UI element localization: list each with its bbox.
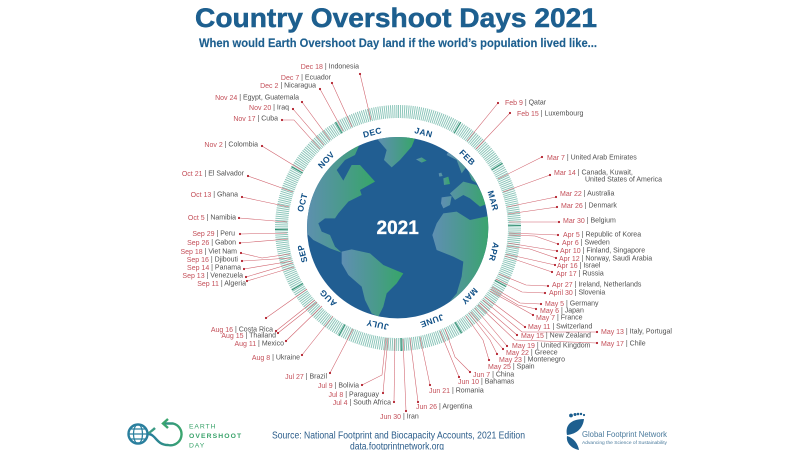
logo: Global Footprint Network: Advancing the Science of Sustainability [582,440,668,446]
leader and label: May 17 Chile: May 17 | Chile [601,340,646,348]
leader and label: Nov 17 Cuba [233,116,320,149]
leader and label: May 5 Germany: May 5 | Germany [545,300,599,308]
leader and label: Sep 26 Gabon [187,239,288,246]
leader and label: Jul 4 South Africa: Jul 4 | South Africa [333,400,391,406]
unlabelled leader [265,289,307,319]
leader and label: Aug 8 Ukraine [252,316,333,362]
leader and label: Sep 26 Gabon: Sep 26 | Gabon [187,240,236,246]
globe year: 2021 [377,218,419,239]
leader and label: Dec 2 Nicaragua: Dec 2 | Nicaragua [260,82,316,90]
leader and label: Sep 29 Peru [192,230,287,238]
leader and label: May 25 Spain: May 25 | Spain [488,364,535,370]
leader and label: Mar 22 Australia: Mar 22 | Australia [560,190,614,198]
leader and label: Nov 24 Egypt, Guatemala: Nov 24 | Egypt, Guatemala [215,94,299,102]
month labels: JUNE [419,312,445,330]
leader and label: May 7 France: May 7 | France [536,314,583,322]
leader and label: Oct 21 El Salvador [182,170,293,192]
leader and label: Apr 6 Sweden [509,235,610,246]
leader and label: Dec 18 Indonesia [301,64,371,120]
leader and label: May 6 Japan: May 6 | Japan [540,308,584,314]
leader and label: Sep 13 Venezuela [182,263,293,280]
leader and label: Sep 16 Djibouti [187,256,291,264]
leader and label: Sep 18 Viet Nam: Sep 18 | Viet Nam [180,248,237,256]
leader and label: Jul 4 South Africa [333,339,395,406]
leader and label: May 19 United Kingdom [475,308,591,350]
leader and label: Dec 7 Ecuador [281,74,352,127]
leader and label: May 13 Italy, Portugal: May 13 | Italy, Portugal [601,328,672,336]
month labels: AUG [317,287,339,309]
leader and label: Jun 26 Argentina: Jun 26 | Argentina [416,404,472,410]
leader and label: May 19 United Kingdom: May 19 | United Kingdom [512,342,591,350]
leader and label: May 15 New Zealand: May 15 | New Zealand [521,332,591,340]
leader and label: Apr 10 Finland, Singapore: Apr 10 | Finland, Singapore [560,248,645,254]
logo wordmark [189,424,242,450]
leader and label: Dec 2 Nicaragua [260,82,343,131]
leader and label: Apr 17 Russia [505,256,604,278]
globe [303,130,493,318]
leader and label: Jun 21 Romania: Jun 21 | Romania [429,388,484,394]
leader and label: Jun 10 Bahamas: Jun 10 | Bahamas [458,378,515,386]
month labels: MAR [486,189,501,212]
leader and label: Jul 27 Brazil: Jul 27 | Brazil [285,374,327,380]
leader and label: Jul 27 Brazil [285,329,353,380]
month labels: NOV [316,149,337,170]
leader and label: May 23 Montenegro [469,313,565,364]
leader and label: Oct 21 El Salvador: Oct 21 | El Salvador [182,170,245,178]
leader and label: Mar 14 Canada, Kuwait, USA [503,170,662,192]
leader and label: Aug 15 Thailand: Aug 15 | Thailand [221,332,276,340]
leader and label: Jun 21 Romania [420,337,484,394]
leader and label: Nov 20 Iraq: Nov 20 | Iraq [249,104,289,112]
leader and label: Aug 11 Mexico: Aug 11 | Mexico [234,340,284,348]
leader and label: Mar 30 Belgium: Mar 30 | Belgium [563,218,616,224]
leader and label: Nov 2 Colombia: Nov 2 | Colombia [204,142,258,148]
icon: footprint leaf [567,413,585,450]
logo wordmark: EARTH [189,424,216,430]
leader and label: Feb 15 Luxembourg [476,110,584,149]
leader and label: May 6 Japan [491,289,584,314]
leader and label: Jul 8 Paraguay: Jul 8 | Paraguay [329,392,379,398]
leader and label: May 22 Greece [471,312,558,356]
leader and label: April 30 Slovenia: April 30 | Slovenia [549,290,605,296]
leader and label: Sep 11 Algeria: Sep 11 | Algeria [197,280,246,288]
leader and label: Sep 29 Peru: Sep 29 | Peru [192,230,235,238]
leader and label: Mar 14 Canada, Kuwait, USA: United States of America [585,176,662,184]
calendar tick ring [275,112,521,351]
leader and label: Apr 12 Norway, Saudi Arabia [507,246,652,262]
logo wordmark: DAY [189,442,205,450]
leader and label: Sep 14 Panama: Sep 14 | Panama [187,264,241,272]
leader and label: Aug 15 Thailand [221,302,317,340]
month labels: OCT [295,191,310,213]
leader and label: Sep 14 Panama [187,261,292,272]
leader and label: Dec 7 Ecuador: Dec 7 | Ecuador [281,74,332,82]
leader and label: Sep 16 Djibouti: Sep 16 | Djibouti [187,256,238,264]
leader and label: Dec 18 Indonesia: Dec 18 | Indonesia [301,64,359,70]
logo wordmark: OVERSHOOT [189,433,242,440]
title: Country Overshoot Days 2021 [195,3,597,33]
leader and label: May 17 Chile [478,305,646,348]
subtitle: When would Earth Overshoot Day land if the world’s population lived like... [199,36,597,50]
leader and label: Apr 12 Norway, Saudi Arabia: Apr 12 | Norway, Saudi Arabia [559,256,652,262]
leader and label: Mar 26 Denmark: Mar 26 | Denmark [561,202,617,210]
leader and label: Apr 5 Republic of Korea [509,232,641,238]
leader and label: Aug 16 Costa Rica: Aug 16 | Costa Rica [211,326,273,334]
leader and label: Apr 10 Finland, Singapore [508,243,645,254]
month labels: JAN [414,125,434,140]
leader and label: Jun 10 Bahamas [440,331,515,386]
month labels: FEB [457,147,477,167]
logo: Earth Overshoot Day [128,419,242,450]
leader and label: May 23 Montenegro: May 23 | Montenegro [499,356,565,364]
month labels: MAY [459,286,480,307]
leader and label: Aug 8 Ukraine: Aug 8 | Ukraine [252,354,300,362]
leader and label: Nov 24 Egypt, Guatemala [215,94,330,140]
leader and label: Nov 2 Colombia [204,142,303,171]
leader and label: Aug 11 Mexico [234,306,322,348]
leader and label: Mar 7 UAE: Mar 7 | United Arab Emirates [547,154,637,162]
leader and label: May 15 New Zealand [480,303,591,340]
leader and label: Jun 7 China [445,329,514,378]
leader and label: Nov 20 Iraq [249,104,324,145]
leader and label: May 11 Switzerland [485,297,592,330]
leader and label: Jun 30 Iran: Jun 30 | Iran [380,414,419,420]
leader and label: Apr 27 Ireland, Netherlands [499,274,642,288]
leader and label: May 11 Switzerland: May 11 | Switzerland [528,324,592,330]
leader and label: Oct 13 Ghana [191,192,289,207]
leader and label: Jun 7 China: Jun 7 | China [473,372,514,378]
leader and label: Mar 30 Belgium [509,218,616,224]
leader and label: Sep 13 Venezuela: Sep 13 | Venezuela [182,272,243,280]
leader and label: Jun 26 Argentina [410,338,472,410]
logo wordmark: Global Footprint Network [582,430,668,439]
icon: globe and loop arrow [128,419,182,445]
leader and label: Jul 9 Bolivia: Jul 9 | Bolivia [318,382,359,390]
leader and label: Jul 9 Bolivia [318,338,386,390]
leader and label: May 7 France [490,291,583,322]
leader and label: May 22 Greece: May 22 | Greece [506,350,558,356]
logo: Global Footprint Network [567,413,668,450]
month labels: DEC [362,125,383,140]
source text: Source: National Footprint and Biocapacity Accounts, 2021 Edition [272,430,525,442]
month labels [295,125,501,332]
leader and label: Feb 15 Luxembourg: Feb 15 | Luxembourg [517,110,584,118]
leader and label: Sep 18 Viet Nam [180,248,290,258]
leader and label: Apr 16 Israel: Apr 16 | Israel [557,262,601,270]
leader and label: May 13 Italy, Portugal [483,300,672,336]
leader and label: Oct 5 Namibia [188,214,287,222]
leader and label: Apr 6 Sweden: Apr 6 | Sweden [562,240,610,246]
leader and label: Jun 30 Iran [380,339,419,420]
leader and label: April 30 Slovenia [496,279,605,296]
leader and label: Feb 9 Qatar [467,100,547,141]
leader and label: Feb 9 Qatar: Feb 9 | Qatar [505,100,547,106]
leader and label: Jul 8 Paraguay [329,338,388,398]
source text [272,430,525,450]
leader and label: Mar 7 UAE [498,154,637,179]
leader and label: Apr 17 Russia: Apr 17 | Russia [556,270,604,278]
leader and label: Mar 14 Canada, Kuwait, USA: Mar 14 | Canada, Kuwait, [554,170,633,176]
month labels: APR [487,241,501,262]
leader and label: Mar 22 Australia [507,190,614,207]
leader and label: Oct 5 Namibia: Oct 5 | Namibia [188,214,236,222]
leader and label: Sep 11 Algeria [197,267,294,288]
leader and label: May 25 Spain [466,316,535,370]
leader and label: Aug 16 Costa Rica [211,300,315,334]
leader and label: Oct 13 Ghana: Oct 13 | Ghana [191,192,238,198]
month labels: SEP [295,244,310,264]
leader and label: Apr 16 Israel [506,254,601,270]
leader and label: May 5 Germany [492,287,599,308]
leader and label: Apr 5 Republic of Korea: Apr 5 | Republic of Korea [563,232,641,238]
leader and label: Mar 26 Denmark [508,202,617,214]
month labels: JULY [365,318,389,332]
leader and label: Nov 17 Cuba: Nov 17 | Cuba [233,116,278,122]
leader and label: Apr 27 Ireland, Netherlands: Apr 27 | Ireland, Netherlands [552,282,642,288]
